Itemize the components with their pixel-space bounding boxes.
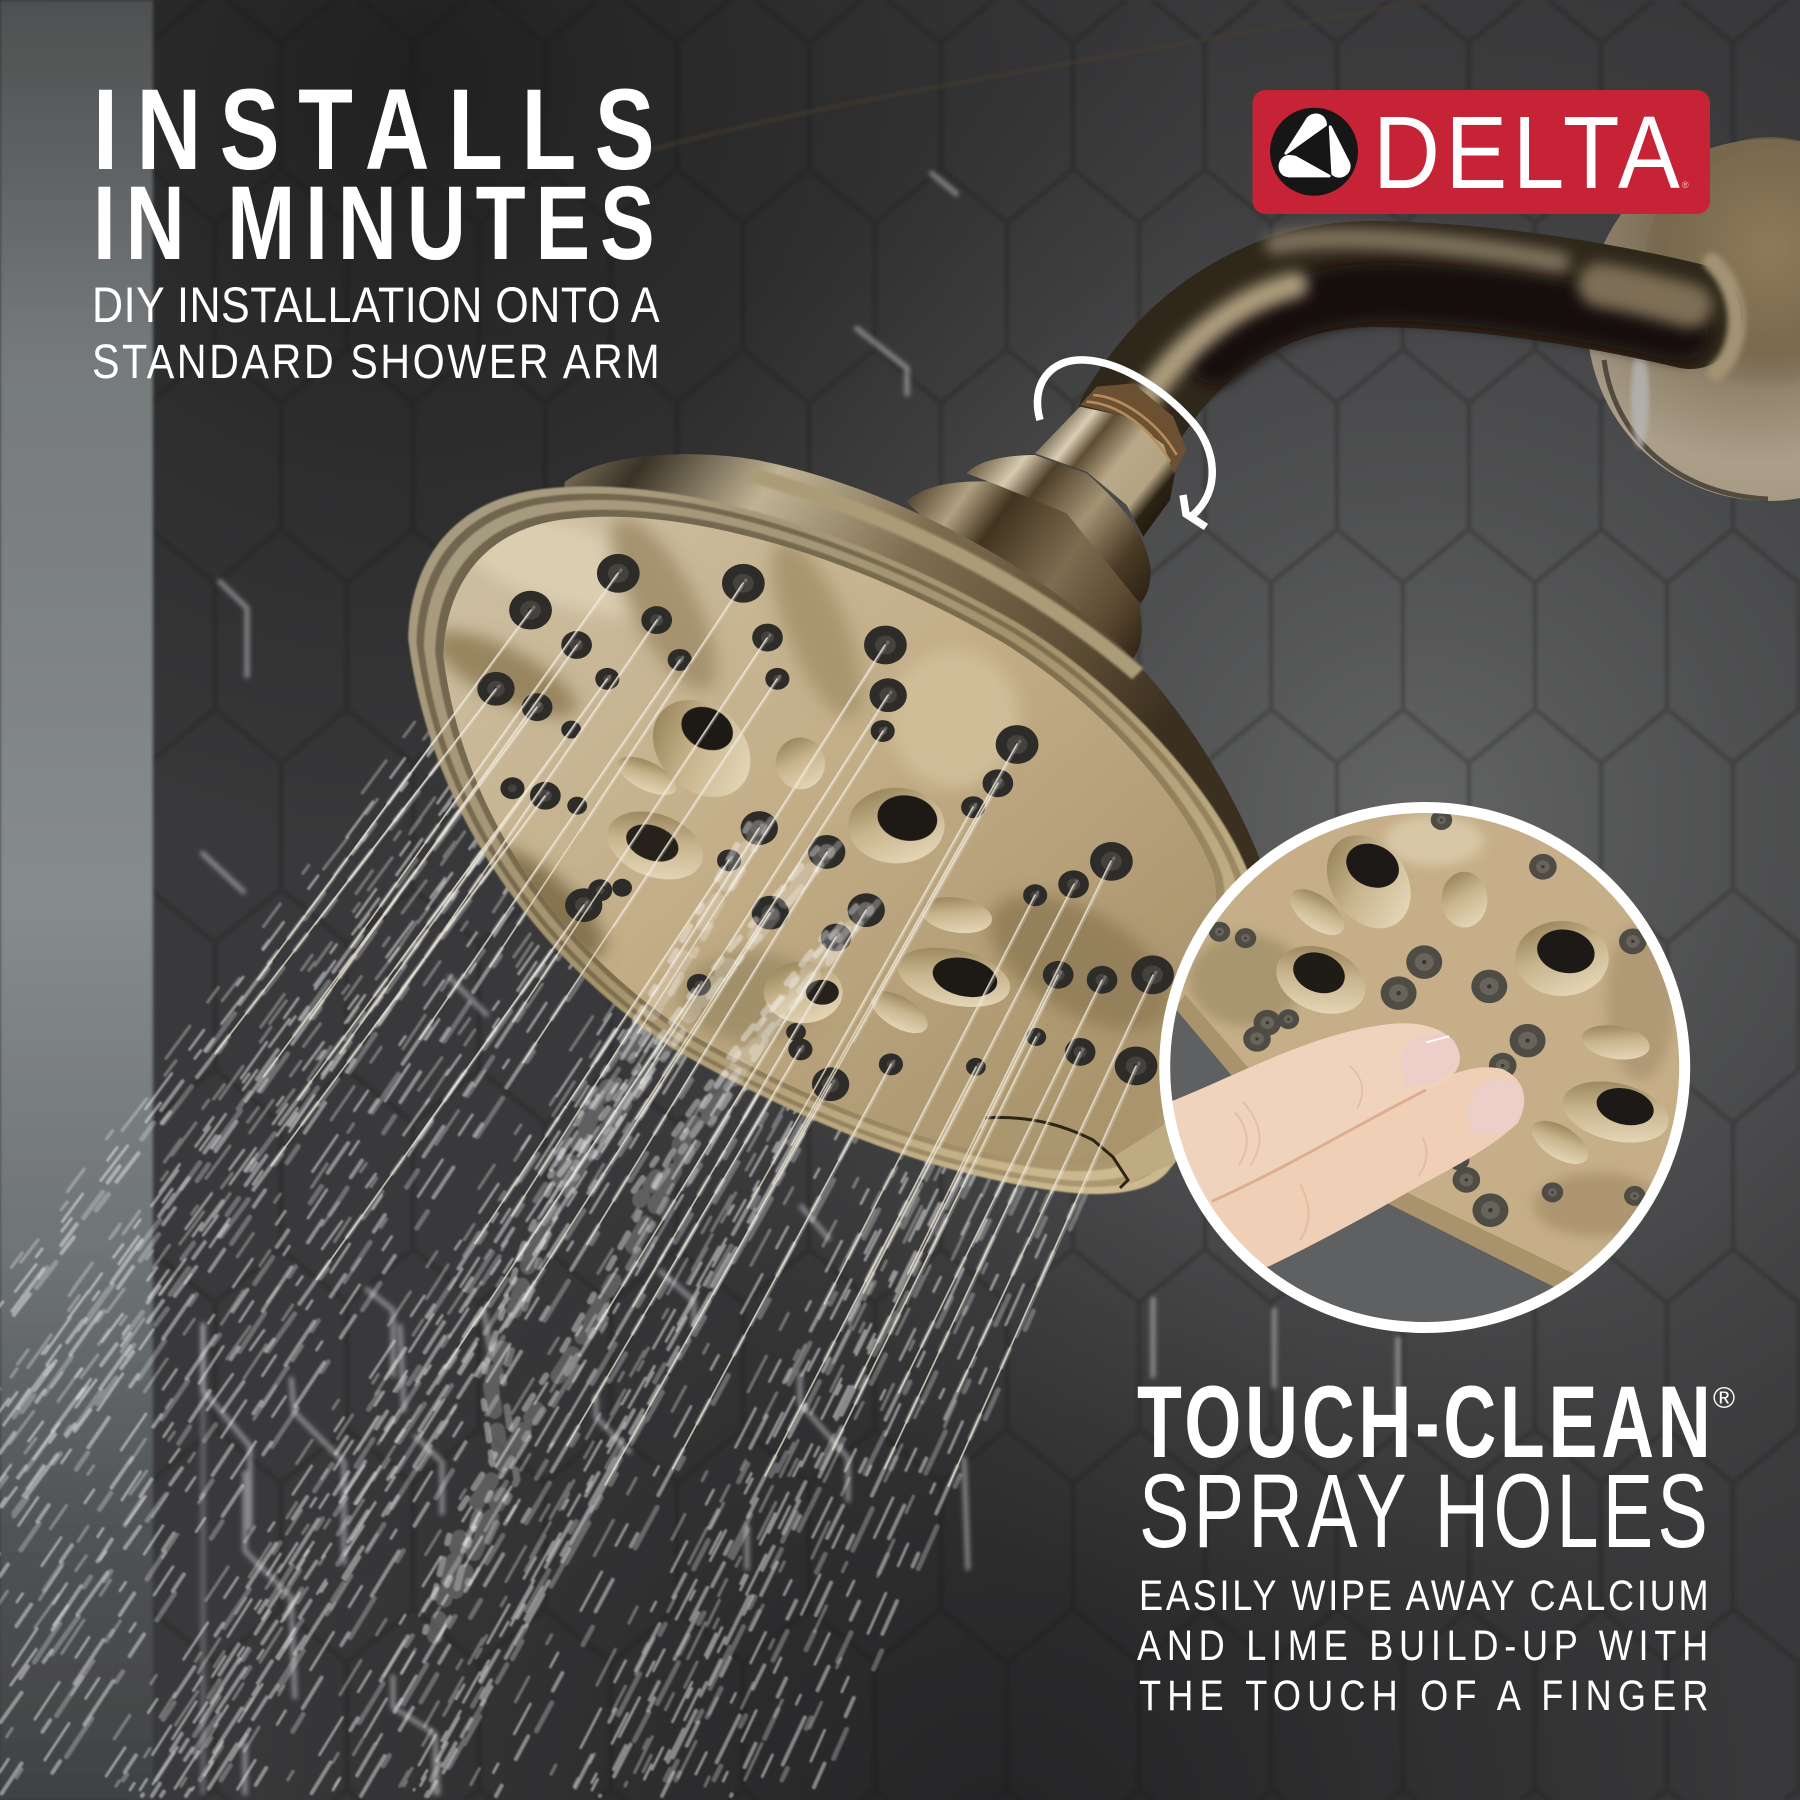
lower lip with crack	[985, 1118, 1175, 1188]
thin jets on the spray face	[0, 570, 1156, 1796]
close-up nozzles	[1220, 820, 1635, 1210]
bowl light band	[751, 475, 1138, 674]
rim rings	[408, 486, 1253, 1194]
body line 1: EASILY WIPE AWAY CALCIUM	[1139, 1572, 1709, 1620]
callout title: TOUCH-CLEAN	[1137, 1365, 1711, 1479]
subtitle line 2: STANDARD SHOWER ARM	[92, 335, 660, 389]
red badge	[1252, 90, 1710, 214]
body line 3: THE TOUCH OF A FINGER	[1139, 1672, 1709, 1720]
white triangular mark	[1280, 115, 1349, 176]
shower arm and wall flange	[1130, 137, 1800, 501]
upper neck step	[967, 455, 1151, 603]
curved arm	[1130, 238, 1737, 420]
inset: finger cleaning the spray holes	[1159, 802, 1690, 1333]
shower head	[408, 454, 1278, 1194]
close-up dimples and holes	[1264, 821, 1676, 1173]
face shading	[444, 517, 1172, 1045]
heading: installs in minutes	[92, 65, 660, 389]
white inset ring	[1165, 808, 1685, 1328]
callout: touch-clean spray holes	[1137, 1365, 1735, 1720]
subtitle line 1: DIY INSTALLATION ONTO A	[92, 277, 660, 333]
large spray dimples	[595, 683, 1017, 1041]
callout subtitle: SPRAY HOLES	[1139, 1453, 1708, 1570]
wordmark: DELTA	[1373, 94, 1681, 210]
registered mark: ®	[1682, 180, 1689, 190]
close-up face shading	[1189, 816, 1675, 1237]
lower finger	[1208, 1067, 1524, 1280]
upper finger	[1143, 1023, 1460, 1233]
close-up spray face	[1177, 813, 1680, 1287]
registered mark: ®	[1713, 1382, 1735, 1415]
black circle	[1270, 108, 1358, 196]
threads	[1080, 383, 1187, 473]
neck collar	[1035, 407, 1175, 537]
lower neck step	[907, 481, 1142, 665]
tile highlights	[201, 172, 1398, 1795]
rotation arrow	[1037, 360, 1212, 527]
lighter left wall strip	[0, 0, 153, 1800]
head back bowl	[565, 454, 1278, 1037]
body line 2: AND LIME BUILD-UP WITH	[1137, 1622, 1708, 1670]
close-up rim band	[1175, 994, 1575, 1290]
title line 2: IN MINUTES	[93, 164, 655, 281]
blotchy water column	[425, 820, 878, 1636]
inset photo content	[1170, 813, 1680, 1322]
title line 1: INSTALLS	[93, 65, 655, 194]
spray face	[443, 517, 1217, 1164]
shower head neck	[907, 383, 1187, 665]
wall escutcheon	[1587, 137, 1800, 501]
spray nozzles	[496, 573, 1153, 1084]
water streaks behind the head	[0, 557, 1167, 1796]
Delta logo	[1252, 90, 1710, 214]
